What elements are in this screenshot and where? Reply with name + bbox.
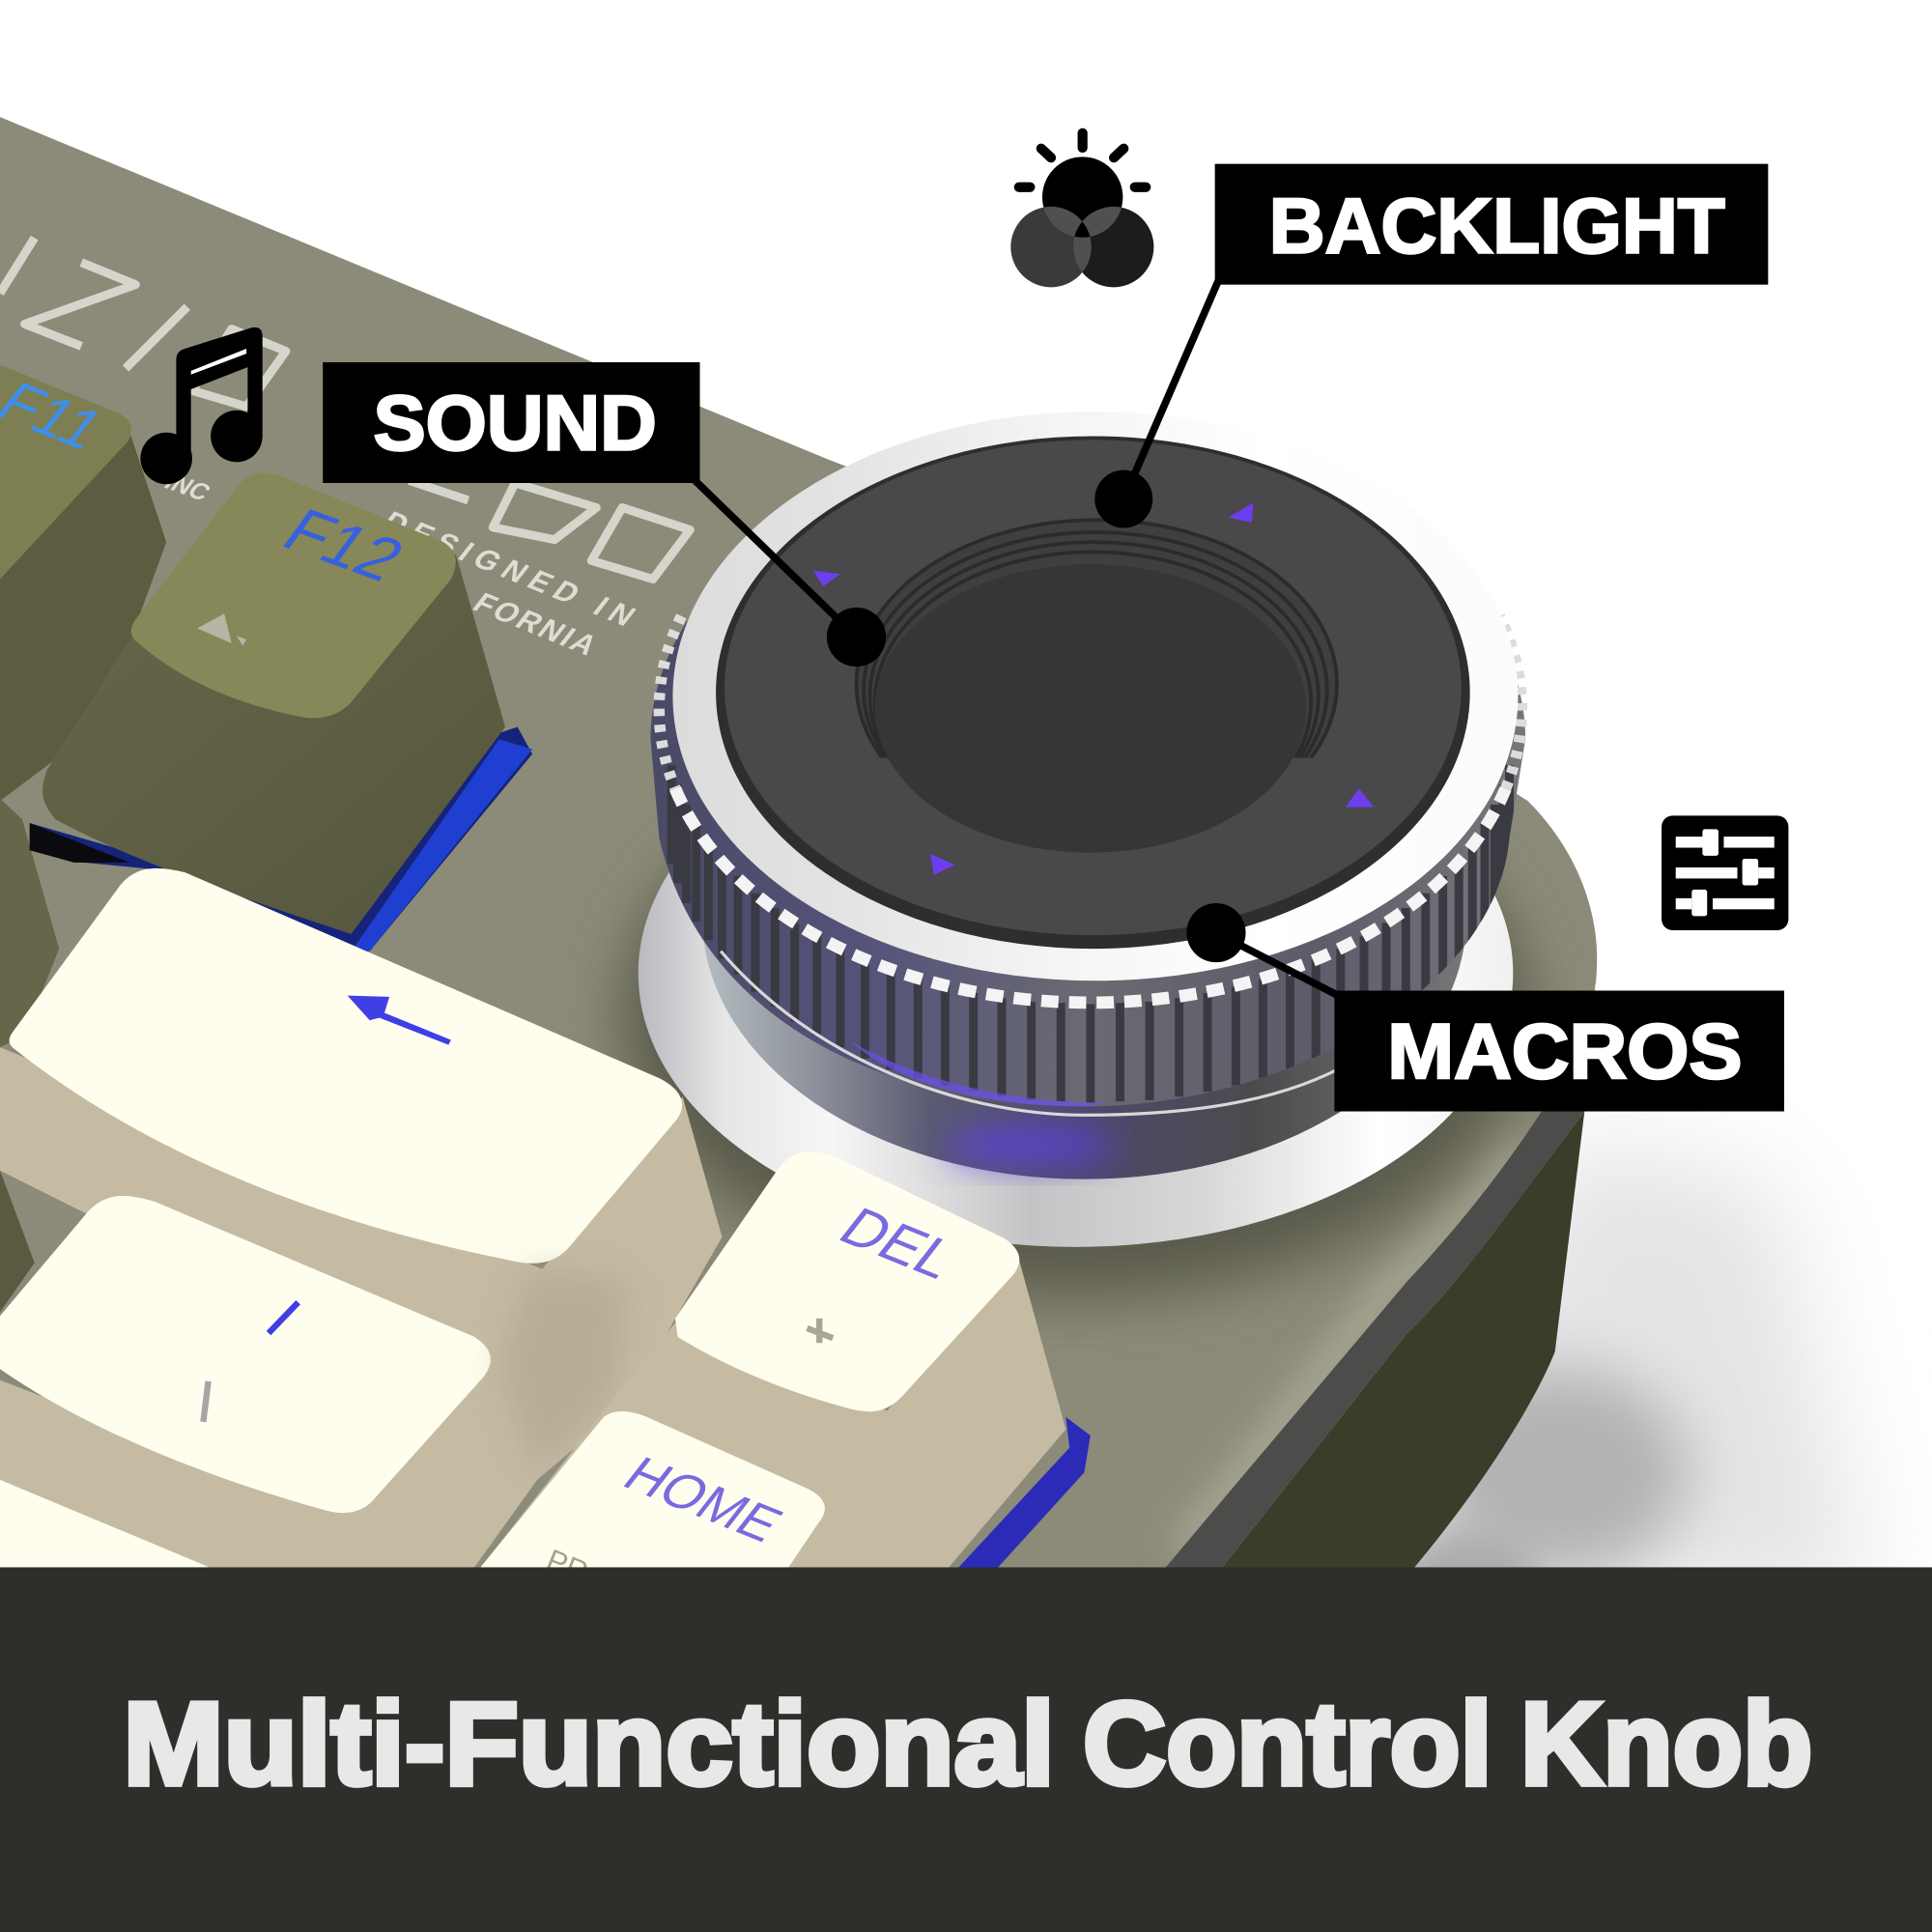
anchor dot	[1094, 470, 1152, 528]
plate edge highlight	[1182, 1146, 1521, 1552]
collar rim line	[721, 952, 1355, 1115]
knob top silver ring	[672, 412, 1518, 980]
collar teeth	[675, 788, 1506, 1003]
knob shadow on plate	[595, 856, 1555, 1326]
label	[1215, 164, 1768, 285]
label	[1334, 991, 1784, 1112]
keycap: DEL: DEL	[828, 1197, 971, 1290]
footer band	[0, 1567, 1932, 1932]
icon: backlight RGB sun	[1010, 133, 1153, 287]
icon: sliders	[1662, 815, 1788, 930]
knob base ring	[638, 872, 1513, 1247]
knob dark top	[716, 437, 1470, 949]
engraved caption: FORNIA	[467, 587, 604, 661]
keycap: HOME: PR	[542, 1543, 592, 1589]
callout: MACROS	[1186, 903, 1784, 1112]
photo: keyboard with control knob	[0, 117, 1878, 1567]
glow under F12	[30, 727, 532, 952]
leader line	[1123, 277, 1220, 499]
anchor dot	[827, 608, 886, 667]
keycap: backspace	[0, 868, 722, 1480]
engraved caption: INC	[159, 468, 216, 506]
knob purple glow	[943, 1126, 1115, 1166]
label text: SOUND	[373, 381, 657, 468]
knob knurled collar	[651, 613, 1527, 1117]
glow right of DEL	[958, 1417, 1091, 1567]
collar side teeth	[659, 616, 1521, 788]
purple indicators	[813, 502, 1374, 875]
knob center button	[875, 564, 1306, 853]
knob lower band	[703, 941, 1464, 1179]
callout: BACKLIGHT	[1094, 164, 1768, 528]
leader line	[693, 478, 856, 637]
knob grooves	[856, 520, 1337, 853]
leader line	[1216, 933, 1343, 998]
keycap: HOME: HOME	[612, 1447, 793, 1552]
label text: BACKLIGHT	[1269, 183, 1725, 270]
keycap: bottom-left	[0, 1480, 210, 1567]
engraved caption	[159, 468, 642, 661]
title: Control	[1083, 1678, 1492, 1809]
anchor dot	[1186, 903, 1246, 962]
icon: music note	[140, 327, 263, 484]
label	[323, 362, 699, 483]
engraved plate text	[0, 238, 690, 579]
keycap: HOME	[480, 1411, 899, 1589]
keycap: slash	[0, 1196, 537, 1567]
keycap: DEL	[480, 1151, 1065, 1567]
collar ribs	[671, 765, 1509, 1103]
title	[124, 1678, 1812, 1809]
engraved caption: DESIGNED IN	[375, 505, 642, 632]
title: Knob	[1520, 1678, 1812, 1809]
key side shading	[499, 1269, 629, 1479]
title: Multi-Functional	[124, 1678, 1055, 1809]
table shadow	[1414, 1126, 1878, 1567]
keycap: F12	[43, 473, 505, 934]
keyboard top plate	[0, 117, 1597, 1567]
keycap: F12: F12	[270, 497, 417, 594]
keycap: left edge	[0, 799, 59, 1047]
keyboard side: dark band	[1166, 974, 1597, 1567]
callout: SOUND	[323, 362, 886, 667]
keyboard side: leather	[1222, 1112, 1584, 1567]
label text: MACROS	[1387, 1009, 1743, 1095]
keycap: F11	[0, 365, 166, 801]
